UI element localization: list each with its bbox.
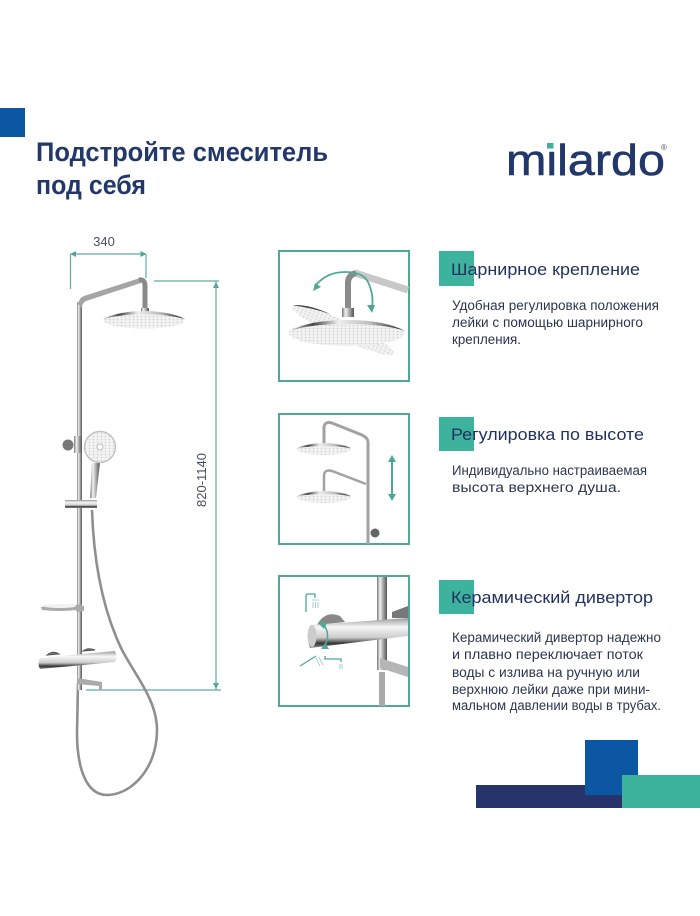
text block: Индивидуально настраиваемая [452,463,647,478]
teal marker [439,580,474,614]
arrow: rotation [316,272,372,307]
teal marker [439,251,474,286]
panel: height adjust [279,414,409,544]
soap dish [41,604,84,611]
title: под себя [36,170,146,200]
mixer body [308,618,408,648]
thermostat mixer [38,651,116,669]
slider holder [65,500,97,508]
feature 2: height [439,417,647,495]
shower arm drop [139,280,145,310]
product: shower system [38,278,185,795]
icon: hand shower [300,656,316,666]
text block: лейки с помощью шарнирного [452,315,643,330]
text block: Удобная регулировка положения [452,298,659,313]
upper head [297,443,351,455]
feature 1: swivel [439,251,659,347]
bath spout [77,678,102,690]
icon: spout [325,656,341,662]
hand shower [90,463,100,498]
diverter arrows [322,622,328,647]
level head [289,320,405,346]
shower arm [78,278,141,308]
hose [77,510,157,795]
text block [452,298,659,347]
dimension: width 340 [70,234,146,289]
panel: swivel joint [279,251,409,381]
text block [452,463,647,495]
arrow: up and down [391,458,393,497]
heading: Шарнирное крепление [451,260,640,279]
heading: Регулировка по высоте [451,425,644,444]
text block: крепления. [452,332,521,347]
dimension: height 820-1140 [86,281,221,690]
heading: Керамический дивертор [451,588,653,607]
logo: milardo: ® [661,143,667,152]
shower arm [355,273,408,290]
text block: воды с излива на ручную или [452,665,640,680]
riser pole [77,302,82,690]
corner accent: bottom right blocks [476,740,700,808]
wall bracket [62,440,74,450]
corner accent: blue square [0,108,25,137]
riser [324,423,368,544]
overhead shower head [103,312,185,328]
hose [379,672,385,706]
text block: и плавно переключает поток [452,647,643,662]
tilted head [288,298,398,362]
knob tops [317,614,345,625]
teal marker [439,417,474,451]
dimension: height 820-1140: 820-1140 [194,453,209,507]
riser [377,577,387,639]
feature 3: diverter [439,580,661,713]
text block [452,630,661,713]
spout [380,658,408,677]
logo: milardo: milardo [506,136,665,185]
text block: высота верхнего душа. [452,480,621,495]
lower head [297,491,351,503]
icon: overhead shower [306,594,315,612]
panel: ceramic diverter [279,576,409,706]
text block: мальном давлении воды в трубах. [452,698,661,713]
dimension: width 340: 340 [93,234,115,249]
text block: верхнюю лейки даже при мини- [452,682,650,697]
title [36,137,328,200]
text block: Керамический дивертор надежно [452,630,661,645]
title: Подстройте смеситель [36,137,328,167]
